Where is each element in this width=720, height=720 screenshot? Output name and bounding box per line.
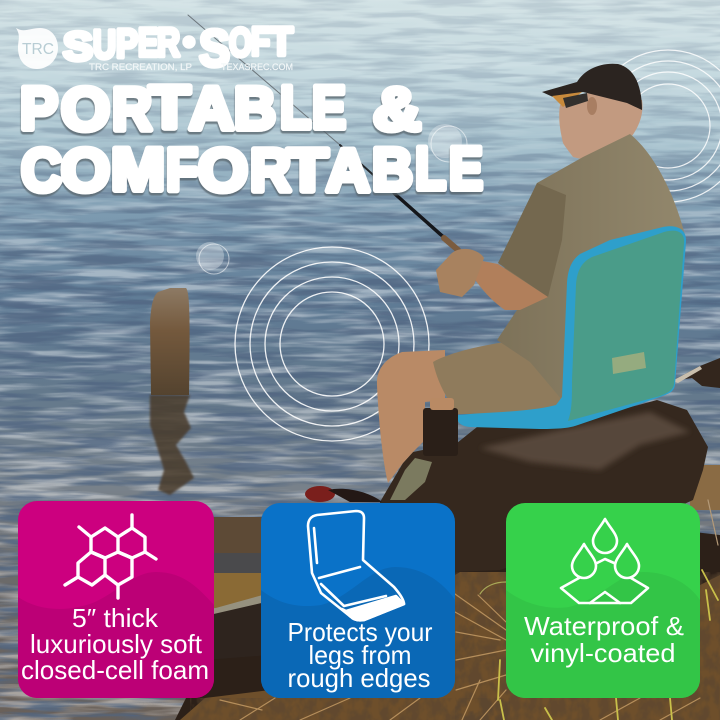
logo: Super-Soft wordmark: P	[116, 22, 138, 66]
title line: Portable &	[20, 74, 421, 143]
text: foam benefit: luxuriously soft	[30, 629, 203, 659]
forearm	[470, 260, 548, 310]
neck and head	[559, 92, 643, 160]
text: waterproof benefit: vinyl-coated	[530, 638, 676, 668]
title line: Portable &: P	[20, 75, 58, 142]
logo: Super-Soft wordmark: O	[229, 21, 252, 65]
logo: Super-Soft wordmark: R	[157, 21, 180, 65]
title line: Comfortable: O	[198, 137, 248, 204]
title line: Comfortable: A	[326, 137, 370, 204]
concentric rings: centre water	[235, 247, 429, 441]
logo: TRC drop	[16, 28, 58, 69]
boulder	[380, 400, 708, 572]
sunglasses	[563, 93, 588, 108]
title line: Comfortable: R	[250, 137, 291, 204]
logo: small company line: TEXASREC.COM	[221, 62, 293, 73]
logo: Super-Soft wordmark: S	[199, 20, 230, 78]
logo: small company line: TRC RECREATION, LP	[89, 62, 192, 73]
logo: Super-Soft wordmark: S	[63, 25, 93, 69]
text: foam benefit	[21, 603, 209, 685]
title line: Portable &: T	[149, 74, 190, 141]
title line: Portable &: O	[61, 76, 110, 143]
logo: Super-Soft wordmark	[63, 20, 293, 78]
title line: Comfortable: B	[372, 136, 413, 203]
title line: Comfortable: E	[449, 135, 483, 202]
wooden post and reflection	[150, 288, 194, 495]
title line: Comfortable	[21, 135, 483, 204]
text: leg protection benefit: legs from	[308, 640, 412, 670]
logo: Super-Soft wordmark: U	[93, 23, 116, 67]
leg	[377, 350, 445, 483]
panel: leg protection	[261, 503, 455, 698]
small bubble: right	[428, 124, 467, 162]
text: foam benefit: 5″ thick	[72, 603, 159, 633]
icon: foam honeycomb cells	[65, 515, 156, 598]
panel: foam	[18, 501, 214, 698]
title line: Portable &: L	[280, 74, 311, 141]
text: leg protection benefit: rough edges	[288, 663, 430, 693]
insulated cup	[423, 398, 458, 456]
icon: water drops over vinyl	[561, 519, 648, 603]
shallow water at far right	[690, 465, 720, 510]
bag on shore	[305, 486, 382, 502]
hand and reel	[436, 249, 484, 297]
shirt	[497, 134, 685, 400]
shirt sleeve shade	[498, 183, 566, 297]
text: waterproof benefit: Waterproof &	[524, 611, 684, 641]
text: foam benefit: closed-cell foam	[21, 655, 209, 685]
shoreline ground and dry grass	[175, 510, 720, 720]
seat cushion	[458, 226, 686, 429]
shallow water and sand: between pink and blue panels	[205, 517, 270, 660]
cap brim underside	[552, 92, 582, 107]
title line: Comfortable: C	[21, 137, 62, 204]
text: leg protection benefit	[288, 617, 433, 693]
title line: Portable &: &	[373, 76, 421, 143]
title line: Comfortable: T	[287, 137, 328, 204]
fishing rod	[188, 15, 458, 250]
title line: Portable &: B	[234, 75, 276, 142]
logo: Super-Soft wordmark: F	[251, 20, 270, 64]
fisherman	[377, 64, 685, 483]
title line: Portable &: R	[112, 76, 152, 143]
cap	[542, 64, 642, 110]
title line: Comfortable: O	[61, 137, 110, 204]
icon: seat cushion	[308, 511, 404, 620]
text: waterproof benefit	[524, 611, 684, 668]
logo: TRC drop: TRC	[22, 41, 54, 58]
title line: Comfortable: L	[415, 135, 446, 202]
title line: Portable &: E	[312, 74, 346, 141]
logo: small company line	[89, 62, 293, 73]
ear	[587, 97, 597, 115]
distant rock at right	[672, 358, 720, 388]
concentric rings: upper right	[592, 50, 720, 202]
logo: Super-Soft wordmark: T	[270, 20, 293, 64]
logo: Super-Soft wordmark: E	[138, 21, 158, 65]
grass blades	[220, 460, 718, 720]
title line: Comfortable: M	[111, 136, 165, 203]
text: leg protection benefit: Protects your	[288, 617, 433, 647]
title line: Comfortable: F	[166, 136, 198, 203]
title line: Portable &: A	[189, 75, 234, 142]
small bubble: left	[196, 242, 229, 274]
shorts	[433, 342, 565, 414]
panel: waterproof	[506, 503, 700, 698]
